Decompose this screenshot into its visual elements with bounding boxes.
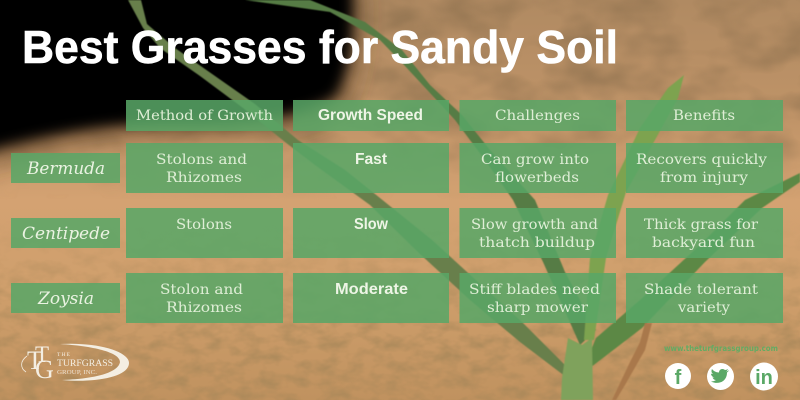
header: growth speed xyxy=(293,100,449,131)
row: centipede xyxy=(11,208,783,258)
cell: benefits xyxy=(626,143,783,193)
header row xyxy=(126,100,783,131)
cell: method: Rhizomes xyxy=(166,300,242,316)
cell: method xyxy=(126,143,283,193)
cell: speed: Slow xyxy=(354,216,389,233)
row: bermuda xyxy=(11,143,783,193)
header: growth speed: Growth Speed xyxy=(318,107,423,124)
header: challenges: Challenges xyxy=(495,108,580,124)
cell: challenges xyxy=(460,143,616,193)
cell: benefits: backyard fun xyxy=(652,235,755,251)
label: centipede: Centipede xyxy=(22,224,110,244)
header: benefits xyxy=(626,100,783,131)
label: bermuda xyxy=(11,153,120,183)
cell: benefits xyxy=(626,208,783,258)
cell: speed: Moderate xyxy=(335,281,408,298)
cell: benefits: Thick grass for xyxy=(644,217,759,233)
cell: challenges: flowerbeds xyxy=(495,170,579,186)
icon: twitter xyxy=(707,363,734,390)
cell: method: Rhizomes xyxy=(166,170,242,186)
cell: benefits: Shade tolerant xyxy=(644,282,759,298)
grass blade: right xyxy=(582,173,800,374)
cell: speed xyxy=(293,208,449,258)
logo swoosh xyxy=(60,344,129,381)
logo wordmark xyxy=(57,352,113,376)
cell: method: Stolons and xyxy=(156,152,247,168)
header: method of growth xyxy=(126,100,283,131)
label: zoysia: Zoysia xyxy=(37,289,94,309)
icon: facebook: f xyxy=(675,367,682,389)
cell: method: Stolon and xyxy=(160,282,243,298)
icon: linkedin: in xyxy=(755,367,773,389)
cell: challenges: thatch buildup xyxy=(479,235,595,251)
icon: linkedin xyxy=(750,362,778,390)
cell: speed xyxy=(293,143,449,193)
logo left arc xyxy=(22,356,27,372)
cell: challenges: Slow growth and xyxy=(471,217,598,233)
logo wordmark: GROUP, INC. xyxy=(57,370,98,376)
label: bermuda: Bermuda xyxy=(26,159,105,179)
icon: facebook xyxy=(665,363,691,389)
logo wordmark: THE xyxy=(57,352,71,358)
title: Best Grasses for Sandy Soil xyxy=(22,21,618,73)
header: method of growth: Method of Growth xyxy=(136,108,273,124)
cell: method xyxy=(126,208,283,258)
grass blade: upper right xyxy=(584,75,684,340)
cell: speed xyxy=(293,273,449,323)
dry leaf xyxy=(612,323,652,400)
grass stem xyxy=(561,338,593,400)
grass blade: long left xyxy=(128,0,575,377)
grass blade: upper arching xyxy=(245,0,596,345)
cell: challenges: sharp mower xyxy=(487,300,589,316)
label: zoysia xyxy=(11,283,120,313)
header: benefits: Benefits xyxy=(673,108,735,124)
label: centipede xyxy=(11,218,120,248)
cell: benefits xyxy=(626,273,783,323)
logo monogram: T xyxy=(27,346,43,375)
cell: challenges: Stiff blades need xyxy=(469,282,600,298)
logo monogram: G xyxy=(35,355,54,384)
website url: www.theturfgrassgroup.com xyxy=(664,344,778,353)
cell: challenges xyxy=(460,208,616,258)
logo wordmark: TURFGRASS xyxy=(57,358,113,368)
cell: benefits: variety xyxy=(677,300,730,316)
header: challenges xyxy=(460,100,616,131)
cell: benefits: Recovers quickly xyxy=(636,152,767,168)
cell: benefits: from injury xyxy=(660,170,748,186)
cell: method: Stolons xyxy=(176,217,232,233)
row: zoysia xyxy=(11,273,783,323)
cell: challenges xyxy=(460,273,616,323)
cell: speed: Fast xyxy=(355,151,387,168)
logo monogram: T xyxy=(35,342,49,367)
logo monogram xyxy=(27,342,54,384)
cell: challenges: Can grow into xyxy=(481,152,589,168)
logo: The Turfgrass Group xyxy=(22,342,129,384)
cell: method xyxy=(126,273,283,323)
